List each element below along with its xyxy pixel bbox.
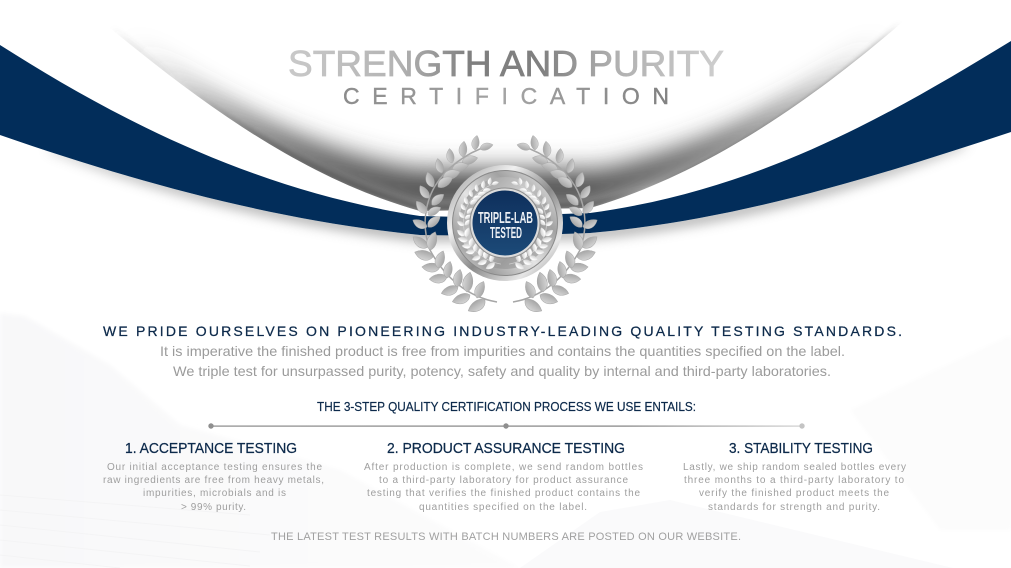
- step 1 text: > 99% purity.: [181, 502, 246, 513]
- intro paragraph: It is imperative the finished product is free from impurities and contains the quantities specified on the label.: [160, 343, 845, 359]
- grey shadow above the white swoosh: [112, 24, 900, 211]
- step 2 text: quantities specified on the label.: [419, 502, 587, 513]
- intro paragraph: [160, 343, 845, 379]
- step 1 text: impurities, microbials and is: [143, 488, 286, 499]
- step 1: acceptance testing: [103, 441, 324, 513]
- intro paragraph: We triple test for unsurpassed purity, potency, safety and quality by internal and third-party laboratories.: [173, 363, 831, 379]
- badge: triple-lab tested seal: [410, 135, 600, 316]
- step 3 text: Lastly, we ship random sealed bottles every: [683, 462, 906, 473]
- step 1 text: raw ingredients are free from heavy metals,: [103, 475, 324, 486]
- medal centre: [470, 188, 540, 258]
- step 2 text: [364, 462, 643, 513]
- badge text: TESTED: [490, 225, 522, 242]
- laurel wreath: right: [513, 135, 600, 316]
- step 3: stability testing: [683, 441, 906, 513]
- step 2 text: After production is complete, we send random bottles: [364, 462, 643, 473]
- step 3 text: verify the finished product meets the: [699, 488, 889, 499]
- step 2 text: to a third-party laboratory for product assurance: [379, 475, 628, 486]
- timeline: [208, 423, 805, 429]
- shadow below navy bands: [50, 140, 965, 241]
- badge text: TRIPLE-LAB: [478, 210, 533, 227]
- step 3 text: standards for strength and purity.: [708, 502, 880, 513]
- step 3 title: 3. STABILITY TESTING: [729, 441, 873, 457]
- step 1 text: Our initial acceptance testing ensures the: [107, 462, 322, 473]
- step 3 text: three months to a third-party laboratory to: [684, 475, 904, 486]
- heading statement: WE PRIDE OURSELVES ON PIONEERING INDUSTRY-LEADING QUALITY TESTING STANDARDS.: [103, 323, 902, 339]
- step 2 title: 2. PRODUCT ASSURANCE TESTING: [387, 441, 625, 457]
- laurel wreath: left: [410, 135, 497, 316]
- step 2: product assurance testing: [364, 441, 643, 513]
- medal rings: [447, 165, 563, 281]
- step 3 text: [683, 462, 906, 513]
- footer note: THE LATEST TEST RESULTS WITH BATCH NUMBERS ARE POSTED ON OUR WEBSITE.: [271, 531, 741, 543]
- navy band: left: [0, 45, 505, 236]
- step 1 text: [103, 462, 324, 513]
- inner wreath: [456, 177, 554, 271]
- step 1 title: 1. ACCEPTANCE TESTING: [125, 441, 297, 457]
- title: STRENGTH AND PURITY: [288, 43, 724, 84]
- step 2 text: testing that verifies the finished product contains the: [367, 488, 640, 499]
- process heading: THE 3-STEP QUALITY CERTIFICATION PROCESS WE USE ENTAILS:: [317, 400, 696, 414]
- subtitle: CERTIFICATION: [343, 83, 669, 109]
- badge text: [478, 210, 533, 242]
- navy band: right: [505, 41, 1011, 236]
